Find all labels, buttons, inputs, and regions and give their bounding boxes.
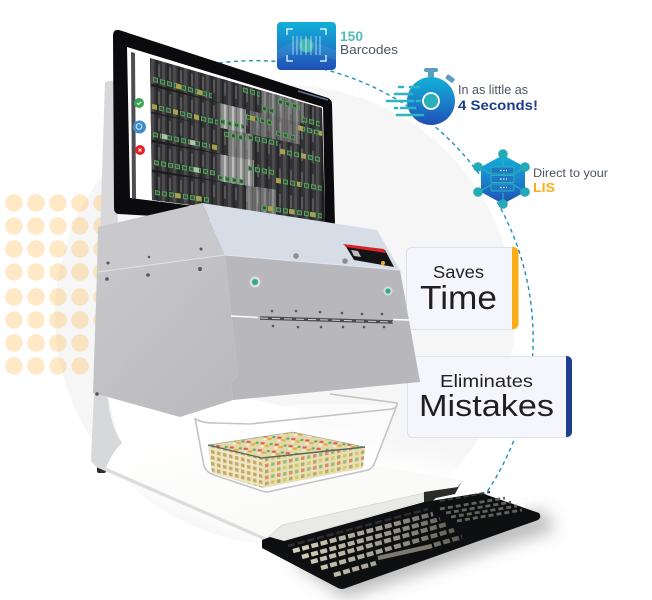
product label — [343, 244, 394, 267]
card: eliminates mistakes: Eliminates — [440, 371, 533, 391]
label: 150 barcodes — [340, 29, 399, 57]
clear tray with sample basket — [195, 394, 397, 492]
base right latch — [424, 481, 462, 503]
icon: LIS server hexagon — [473, 149, 530, 209]
basket lid — [208, 432, 365, 458]
orange dot grid — [5, 194, 111, 375]
white glow under base — [95, 440, 480, 548]
card: saves time: Saves — [433, 262, 484, 282]
housing upper side — [97, 203, 225, 272]
numeric keypad — [440, 498, 522, 521]
housing screws — [95, 248, 385, 396]
basket side — [262, 447, 365, 488]
basket front — [208, 445, 263, 488]
card: saves time: Time — [420, 279, 497, 316]
card: eliminates mistakes — [408, 356, 572, 438]
label: 4 seconds: In as little as — [458, 83, 528, 97]
card: saves time — [406, 247, 518, 330]
lit area under housing — [108, 395, 300, 450]
stand foot — [97, 465, 106, 473]
label: 4 seconds: 4 Seconds! — [458, 98, 538, 113]
hinge — [231, 316, 409, 322]
housing top face — [202, 203, 400, 270]
rear stand column — [100, 80, 118, 235]
monitor status buttons — [133, 98, 146, 155]
icon: stopwatch — [387, 68, 455, 125]
icon: barcode tile — [277, 22, 336, 70]
housing lower side — [93, 255, 238, 417]
keyboard shadow — [290, 510, 555, 598]
label: direct to LIS: Direct to your — [533, 168, 608, 180]
label: direct to LIS: LIS — [533, 180, 555, 195]
label: direct to LIS — [533, 168, 608, 195]
space bar — [378, 546, 432, 558]
monitor screen: scanned rack image — [150, 58, 325, 222]
base front lip — [267, 493, 424, 541]
stand and base — [91, 392, 462, 541]
stand column — [91, 392, 122, 468]
housing knobs — [250, 276, 392, 296]
tray outline — [195, 394, 397, 492]
label: 150 barcodes: 150 — [340, 29, 363, 44]
background circle — [55, 85, 515, 545]
base rear-left edge — [91, 461, 267, 541]
monitor — [113, 30, 335, 226]
card: eliminates mistakes: Mistakes — [419, 388, 554, 423]
dashed arc connecting features — [219, 61, 533, 495]
label: 4 seconds — [458, 83, 538, 113]
base plate — [105, 436, 462, 538]
keyboard — [262, 492, 540, 589]
housing front — [225, 255, 420, 400]
scanner housing — [93, 203, 420, 417]
label: 150 barcodes: Barcodes — [340, 42, 399, 57]
